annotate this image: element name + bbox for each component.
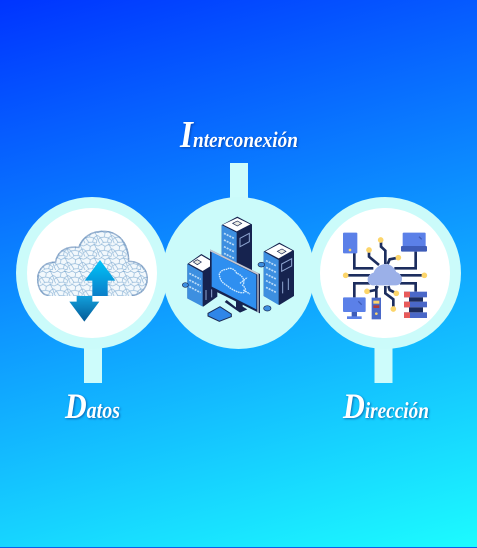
- device: laptop: [401, 233, 427, 252]
- on-screen cloud diagram: [219, 268, 250, 294]
- heading: Interconexión: Interconexión: [179, 114, 298, 156]
- server tower: back: [222, 217, 252, 277]
- small nodes: [182, 262, 271, 311]
- server tower: right: [264, 243, 294, 305]
- stem: Interconexión connector: [230, 163, 248, 208]
- icon: cloud with upload and download arrows: [36, 229, 149, 322]
- icon: cloud network hub: [343, 233, 427, 319]
- connector dots: [343, 237, 427, 312]
- cloud mesh: [36, 229, 149, 297]
- monitor stand: [225, 300, 247, 313]
- monitor: [210, 249, 260, 313]
- stem: Dirección connector: [374, 340, 392, 383]
- connection lines: [346, 240, 424, 308]
- device: server rack: [404, 292, 427, 318]
- panel: right circle: [309, 197, 461, 349]
- stem: Datos connector: [84, 340, 102, 383]
- download arrow: [69, 296, 99, 322]
- panel: left circle: [16, 197, 168, 349]
- upload arrow: [85, 260, 115, 296]
- panel: middle circle: [162, 197, 314, 349]
- device: tower: [372, 298, 381, 319]
- cloud hub: [368, 264, 402, 285]
- device: desktop monitor: [343, 297, 366, 319]
- heading: Datos: Datos: [64, 386, 120, 426]
- device: tablet: [343, 233, 357, 253]
- heading: Dirección: Dirección: [342, 386, 429, 426]
- icon: servers and monitor: [182, 217, 294, 321]
- server tower: left: [187, 254, 217, 307]
- keypad: [208, 307, 231, 321]
